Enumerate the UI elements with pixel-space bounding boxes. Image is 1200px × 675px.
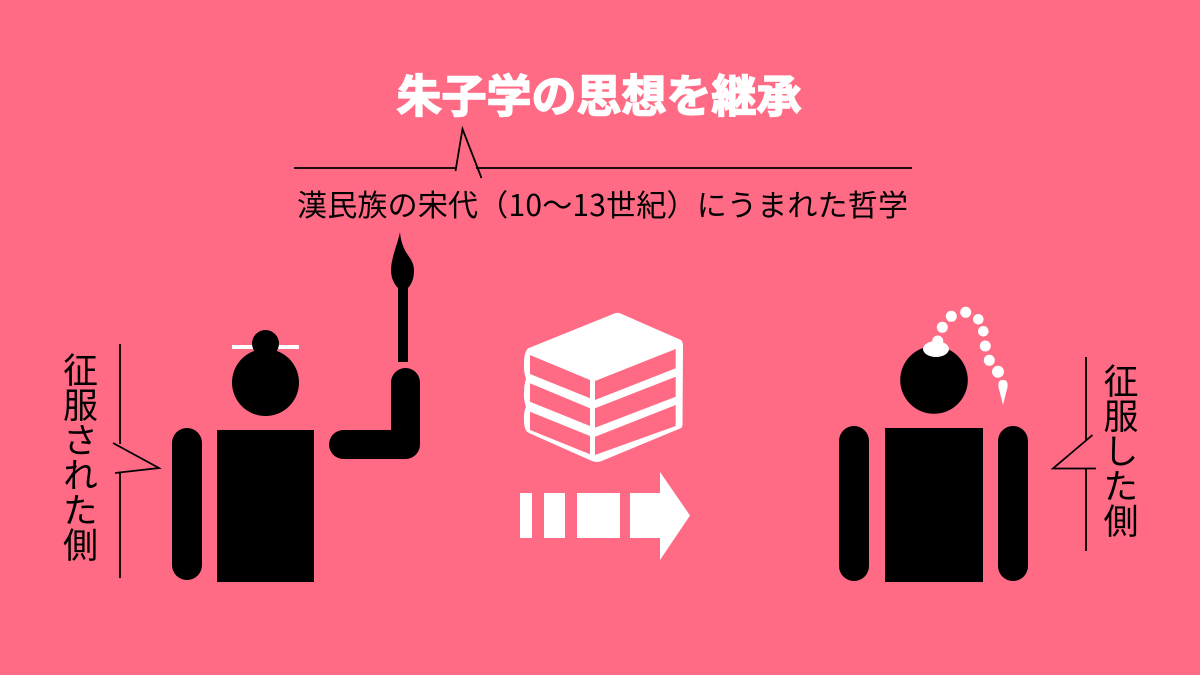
topknot <box>923 336 949 357</box>
right vertical label: 征服した側 <box>1096 363 1146 538</box>
raised arm <box>329 368 420 459</box>
left callout line <box>113 344 159 578</box>
subtitle: 漢民族の宋代（10～13世紀）にうまれた哲学 <box>297 181 908 225</box>
left vertical label: 征服された側 <box>55 352 106 562</box>
brush <box>391 232 414 362</box>
book silhouette <box>524 313 683 462</box>
head <box>900 346 968 414</box>
transfer arrow <box>520 472 690 560</box>
head and bun <box>232 330 299 416</box>
left arm <box>172 428 202 580</box>
title: 朱子学の思想を継承 <box>396 60 802 125</box>
right figure: conquering side <box>839 307 1028 582</box>
top callout line <box>294 129 912 178</box>
books icon <box>524 313 683 462</box>
braid <box>937 307 1008 405</box>
hairpin <box>232 345 299 349</box>
right callout line <box>1053 357 1096 551</box>
left figure: conquered side <box>172 232 420 582</box>
body <box>217 430 314 582</box>
book page panels <box>530 349 676 455</box>
arms <box>839 426 1028 581</box>
body <box>885 428 983 582</box>
